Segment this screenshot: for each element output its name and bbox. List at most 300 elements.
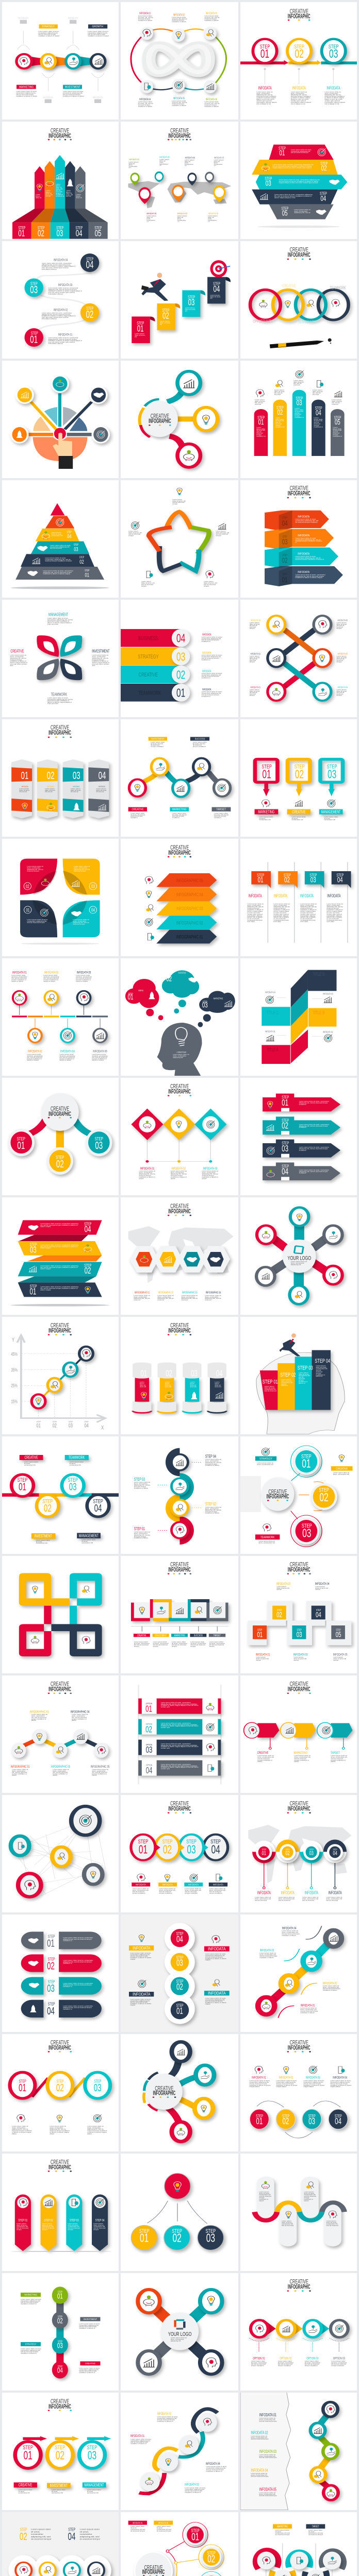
panel: zigzag ribbon bands (2, 1197, 119, 1315)
numbers: STEP (308, 2114, 316, 2119)
top headings: INFODATA 04 (315, 1582, 329, 1586)
numbers: 03 (30, 1246, 37, 1255)
pill labels: INVESTMENT (155, 1634, 167, 1637)
arcs (256, 2550, 344, 2576)
numbers: 02 (276, 1611, 282, 1619)
lorem: Lorem ipsum dolor sit amet, consectetur adipiscing elit, sed do eiusmod tempor incididunt ut labore et dolore magna aliqua ut enim ad minim veniam quis nostrud exercitation ullamco laboris nisi ut aliquip ex ea commodo consequat duis aute irure dolor (273, 903, 290, 922)
numbers: STEP (58, 2340, 62, 2343)
headings: STEP 02 (205, 1502, 216, 1506)
discs (250, 2109, 348, 2129)
lorem: Lorem ipsum dolor sit amet, consectetur adipiscing elit, sed do eiusmod tempor incididunt ut labore et (296, 537, 322, 544)
rings (253, 39, 346, 63)
numbers (21, 770, 106, 782)
axis labels: 35% (11, 1367, 18, 1372)
headings: INFOGRAPHIC 04 (206, 1291, 221, 1294)
labelled pills: GROWTH (92, 25, 103, 28)
numbers: 02 (284, 876, 290, 884)
title: INFOGRAPHIC (168, 850, 191, 857)
numbers (67, 531, 89, 579)
headings: INFODATA (99, 785, 106, 788)
headings: TARGET (331, 1751, 340, 1755)
numbers: 04 (282, 1167, 288, 1177)
headings: INFODATA 06 (206, 98, 217, 101)
numbers: STEP (262, 1848, 266, 1851)
icons (140, 1256, 221, 1263)
arrows (265, 511, 343, 586)
labelled pills: MARKETING (19, 86, 34, 89)
step numbers: STEP (94, 226, 102, 230)
title (168, 1083, 191, 1096)
lorem: Lorem ipsum dolor sit amet, consectetur adipiscing elit, sed do eiusmod tempor incididunt ut labore (134, 1532, 150, 1539)
top pills: SUCCESS (195, 737, 205, 740)
grey connector lines (17, 31, 104, 91)
numbers: 01 (30, 1287, 36, 1297)
runner (279, 1333, 300, 1357)
outer rings (291, 1446, 331, 1547)
numbers: STEP (176, 2004, 184, 2008)
lorem: Lorem ipsum dolor sit amet, consectetur adipiscing elit, sed do eiusmod tempor incididunt ut labore et (21, 2348, 41, 2354)
panel: three arrow rings (2, 2393, 119, 2510)
arrows (278, 1926, 322, 2018)
bulb (174, 2181, 181, 2191)
panel: network of nodes (2, 1795, 119, 1912)
pin faces (132, 173, 224, 199)
lorem: Lorem ipsum dolor sit amet, elit sed do eiusmod tempor incididunt (130, 812, 145, 819)
bottom headings: INFODATA 06 (93, 1050, 107, 1054)
pen (270, 338, 332, 348)
shadow (257, 226, 340, 228)
panel: stacked bars 04-01 (121, 600, 238, 717)
stems (266, 2544, 332, 2576)
icon nodes (140, 27, 217, 93)
numbers: STEP (286, 1848, 290, 1851)
lorem: Lorem ipsum dolor sit amet, elit sed do (66, 190, 73, 197)
title (48, 2159, 72, 2172)
panel: rope of three rings (2, 2034, 119, 2151)
rings (177, 371, 218, 467)
panel: X crossing links (240, 600, 357, 717)
arrow labels: INFOGRAPHIC 04 (176, 892, 203, 897)
blocks (20, 859, 100, 937)
shadow (11, 1304, 109, 1307)
numbers: STEP (210, 1839, 221, 1845)
panel: hub with four branches (121, 2034, 238, 2151)
lorem: Lorem ipsum dolor sit amet elit sed do eiusmod tempor incididunt ut (314, 417, 323, 428)
icons (262, 1214, 338, 1298)
axis labels: X (101, 1425, 104, 1431)
numbers: STEP (93, 1498, 103, 1505)
panel: zigzag squares (240, 1556, 357, 1673)
tab titles: TITLE D (313, 972, 325, 977)
numbers: STEP (333, 1848, 337, 1851)
connectors (39, 1353, 86, 1401)
title: INFOGRAPHIC (288, 2284, 311, 2291)
bulb (175, 1027, 187, 1046)
title: INFOGRAPHIC (48, 2044, 71, 2052)
network lines (14, 1821, 105, 1896)
bars (260, 1350, 331, 1410)
discs (311, 2402, 338, 2500)
box numbers: 03 (282, 538, 288, 546)
headings: OPTION 03 (333, 2357, 345, 2361)
navy cloud (199, 991, 235, 1013)
lorem: Lorem ipsum dolor sit amet, consectetur adipiscing elit, sed do eiusmod tempor incididunt ut labore et dolore magna aliqua ut enim ad minim veniam quis (161, 1764, 199, 1770)
headings (129, 156, 224, 215)
pills (128, 2521, 173, 2576)
lorem: Lorem ipsum dolor sit amet, elit sed do eiusmod tempor incididunt (214, 812, 229, 819)
panel: four discs with arrows (240, 2034, 357, 2151)
pointers (263, 2319, 329, 2337)
headings (134, 1454, 216, 1531)
headings: INFODATA (202, 651, 211, 654)
numbers: 01 (137, 324, 144, 334)
hub (146, 2074, 183, 2110)
panel: overlapping discs on grey (2, 2512, 119, 2576)
panel: pointed rings with options (240, 2273, 357, 2391)
option labels: 01 (145, 1705, 152, 1714)
headings: INFODATA 04 (338, 686, 348, 689)
numbers: STEP (297, 1629, 302, 1632)
lorem: Lorem ipsum dolor sit amet elit sed do eiusmod tempor (250, 622, 259, 629)
step numbers (257, 397, 341, 427)
teal cloud (162, 970, 199, 998)
shadow (11, 586, 109, 589)
panel: hand pressing fan (2, 361, 119, 478)
lorem 05: Lorem ipsum dolor sit amet, elit, sed do eiusmod tempor, incididunt ut labore (172, 100, 187, 106)
numbers: 02 (47, 770, 55, 782)
arrow labels: INFOGRAPHIC 01 (176, 934, 203, 940)
numbers: STEP (284, 873, 291, 878)
title: CREATIVE (144, 2565, 163, 2571)
panel: square signposts (240, 719, 357, 837)
box numbers: STEP (283, 554, 287, 557)
headings: INFODATA (73, 785, 80, 788)
headings: OPTION 01 (253, 2357, 265, 2361)
numbers (57, 2291, 63, 2375)
ribbon curls (150, 277, 231, 321)
numbers: 03 (88, 2449, 96, 2462)
panel: head with thought clouds (121, 958, 238, 1076)
headings: INFODATA 04 (282, 1927, 296, 1930)
step numbers: 01 (18, 229, 25, 239)
numbers: 04 (333, 1850, 337, 1857)
links (32, 2078, 85, 2097)
axis labels: STEP (84, 1420, 89, 1423)
numbers: STEP (68, 1477, 78, 1484)
title: INFOGRAPHIC (48, 730, 71, 737)
orbits (183, 2522, 224, 2576)
numbers: STEP (48, 2003, 55, 2007)
numbers: 01 (257, 1630, 263, 1639)
numbers: STEP (282, 1096, 289, 1100)
step numbers: STEP (257, 416, 265, 420)
links (22, 1740, 99, 1747)
hub arc and links (168, 2541, 199, 2576)
ribbons (257, 1723, 353, 1738)
connectors (291, 1473, 309, 1519)
knot (19, 1573, 102, 1656)
labelled pills: STRATEGY (42, 25, 55, 28)
headings: STEP 01 (134, 1527, 145, 1531)
title: CREATIVE (170, 844, 189, 852)
title (168, 1562, 191, 1574)
bar labels: STEP 04 (315, 1358, 331, 1365)
grey field (240, 1476, 261, 1512)
box numbers: 01 (282, 575, 288, 584)
numbers (137, 282, 220, 334)
step labels: STEP (20, 2528, 27, 2532)
panel: square knot (2, 1556, 119, 1673)
numbers: STEP (162, 1839, 172, 1845)
numbers: STEP (256, 2114, 263, 2119)
cloud numbers: 03 (202, 1001, 208, 1009)
title (287, 2279, 311, 2292)
title: CREATIVE (170, 1562, 189, 1568)
numbers: 03 (57, 2341, 63, 2350)
cloud numbers: STEP (203, 1001, 207, 1004)
bar labels: STEP 02 (280, 1372, 296, 1379)
lorem: Lorem ipsum dolor sit amet, consectetur elit, sed do eiusmod tempor incididunt ut labore (92, 1769, 108, 1776)
nodes (10, 375, 110, 444)
lorem: Lorem ipsum dolor sit amet, consectetur elit, sed do eiusmod tempor incididunt ut labore et dolore (11, 975, 27, 982)
lorem: Lorem ipsum dolor sit amet, consectetur elit, sed do eiusmod tempor incididunt ut labore (257, 1755, 274, 1762)
bars (254, 390, 345, 456)
lorem: Lorem ipsum dolor sit amet, consectetur adipiscing elit, sed do eiusmod tempor incididunt ut labore et dolore magna aliqua ut enim ad minim veniam quis (161, 1722, 199, 1728)
icons (17, 2114, 102, 2122)
numbers: STEP (186, 1839, 197, 1845)
title: CREATIVE (170, 128, 189, 134)
lorem: Lorem ipsum dolor sit amet elit sed do eiusmod tempor incididunt ut (295, 408, 304, 418)
stems (20, 1005, 100, 1028)
icons (262, 2181, 337, 2218)
signposts (255, 759, 342, 789)
step numbers: 02 (38, 229, 44, 239)
numbers: 02 (56, 2449, 64, 2462)
panel: serpentine steps (2, 241, 119, 359)
numbers (191, 2528, 216, 2576)
guides (21, 1353, 86, 1418)
logo mark (294, 1246, 303, 1253)
logo mark (175, 2320, 184, 2329)
lorem: Lorem ipsum dolor sit amet, consectetur adipiscing elit, sed do eiusmod (157, 1295, 174, 1301)
numbers: STEP (282, 2114, 289, 2119)
headings: INFODATA 03 (260, 1949, 274, 1953)
pill labels: CREATIVE (137, 1634, 146, 1637)
side labels (265, 991, 333, 1033)
target (210, 260, 230, 277)
headings: INFODATA (329, 1891, 342, 1895)
step numbers: 02 (277, 408, 283, 417)
numbers: 04 (316, 1611, 321, 1619)
numbers: STEP (56, 1155, 64, 1160)
inner rings (256, 1844, 343, 1860)
numbers: 03 (47, 1982, 55, 1994)
icons (262, 1448, 344, 1531)
lorem 03: Lorem ipsum dolor sit amet, elit, sed do eiusmod tempor, incididunt ut labore (204, 15, 220, 21)
title: INFOGRAPHIC (288, 251, 311, 259)
headings: INFODATA (298, 515, 310, 519)
lorem: Lorem ipsum dolor sit amet, consectetur adipiscing elit, sed do eiusmod tempor incididunt ut labore et dolore (139, 1171, 155, 1179)
pills: CREATIVE (336, 1467, 348, 1470)
lorem: Lorem ipsum dolor sit amet, elit sed do eiusmod tempor (216, 531, 229, 536)
lorem: Lorem ipsum dolor sit amet, consectetur elit sed do eiusmod tempor (17, 2223, 28, 2230)
lorem: Lorem ipsum dolor sit amet, consectetur adipiscing elit, sed do eiusmod tempor incididunt ut labore et dolore magna aliqua ut enim ad minim veniam quis (92, 655, 109, 666)
numbers: 03 (95, 1140, 103, 1151)
bottom labels: INVESTMENT (34, 1534, 52, 1538)
lorem: Lorem ipsum dolor sit amet, consectetur adipiscing elit, sed do eiusmod (205, 1295, 221, 1301)
headings: INFODATA 04 (333, 2076, 347, 2080)
lorem: Lorem ipsum dolor sit amet, consectetur adipiscing elit, sed do eiusmod tempor incididunt ut labore et dolore magna aliqua (303, 2080, 324, 2088)
numbers (30, 1223, 92, 1297)
numbers: 02 (57, 2316, 63, 2325)
pills (255, 809, 342, 815)
title (153, 2086, 176, 2098)
bottom pills (31, 1533, 101, 1539)
numbers (18, 1477, 103, 1514)
pills: INVESTMENT (84, 2318, 97, 2320)
lorem: Lorem ipsum dolor sit amet, consectetur elit, sed do eiusmod tempor incididunt ut labore (31, 1714, 47, 1721)
panel: four cylinders (121, 1317, 238, 1434)
headings: INFODATA (298, 571, 310, 574)
numbers: 01 (282, 1098, 288, 1108)
step rings with icons (17, 54, 105, 69)
numbers: STEP (43, 1498, 53, 1505)
lorem: Lorem ipsum dolor sit amet, consectetur adipiscing elit, sed do eiusmod tempor incididunt ut labore et (157, 2416, 178, 2422)
title (48, 2398, 72, 2411)
headings: INFODATA 05 (259, 2488, 276, 2492)
bottom headings: INFODATA 03 (293, 1653, 308, 1657)
lorem: Lorem ipsum dolor sit amet, elit sed do eiusmod tempor (172, 499, 186, 505)
lorem: Lorem ipsum dolor sit amet, consectetur elit sed do eiusmod tempor incididunt (133, 1888, 149, 1894)
numbers: STEP (30, 1243, 37, 1247)
flags (251, 871, 351, 888)
leaves (32, 871, 87, 925)
thought bubbles (146, 999, 211, 1027)
numbers: 02 (85, 1266, 91, 1276)
numbers: 01 (262, 1850, 266, 1857)
arrow heads (263, 789, 335, 796)
lorem 06: Lorem ipsum dolor sit amet, elit, sed do eiusmod tempor, incididunt ut labore (204, 101, 220, 107)
title: INFOGRAPHIC (288, 2044, 311, 2052)
sketched head (256, 1352, 345, 1434)
lorem: Lorem ipsum dolor sit amet, consectetur adipiscing elit, sed do eiusmod tempor incididunt ut labore et dolore magna aliqua (87, 2126, 107, 2134)
top pills: MARKETING (277, 2525, 288, 2528)
numbers (140, 1369, 223, 1379)
lorem: Lorem ipsum dolor sit amet, consectetur adipiscing elit, sed do eiusmod tempor incididunt ut (202, 691, 222, 697)
lorem: Lorem ipsum dolor sit amet elit sed do eiusmod tempor (250, 655, 259, 663)
rings (129, 758, 230, 797)
panel: three rings on arrow (240, 2, 357, 120)
lorem: Lorem ipsum dolor sit amet, consectetur adipiscing elit, sed do eiusmod tempor incididunt ut labore et dolore magna aliqua ut enim ad minim veniam quis nostrud exercitation ullamco (42, 312, 75, 319)
lorem: Lorem ipsum dolor sit amet, consectetur elit sed do eiusmod tempor incididunt (331, 2361, 347, 2366)
rope (2, 1493, 119, 1497)
cloud numbers: SUCCESS (178, 971, 186, 974)
numbers: 01 (176, 2007, 183, 2016)
lorem: Lorem ipsum dolor sit amet, consectetur elit sed do eiusmod tempor (190, 1641, 206, 1647)
headings: INFODATA (298, 534, 310, 537)
step labels: STEP (265, 177, 272, 181)
title (48, 724, 72, 738)
branches (25, 1120, 94, 1153)
numbers: 04 (337, 876, 343, 884)
headings (54, 259, 72, 337)
lorem: Lorem ipsum dolor sit amet elit sed do eiusmod tempor (336, 689, 347, 696)
links (52, 2301, 68, 2365)
step discs (10, 1131, 110, 1172)
lorem: Lorem ipsum dolor sit amet elit sed do eiusmod tempor (336, 622, 347, 629)
woven bands (131, 1599, 228, 1621)
title: INFOGRAPHIC (168, 1567, 191, 1573)
title (287, 1801, 311, 1814)
icons (314, 2405, 335, 2497)
top headings: INFODATA 05 (77, 971, 91, 975)
title (48, 2040, 72, 2053)
headings: INFODATA 05 (173, 97, 185, 100)
star ribbons (149, 512, 209, 571)
lorem: Lorem ipsum dolor sit amet, consectetur adipiscing elit, sed do eiusmod tempor incididunt ut labore et dolore magna aliqua (330, 2080, 351, 2088)
title: INFOGRAPHIC (288, 490, 311, 497)
side shadows (138, 1685, 222, 1784)
lorem: Lorem ipsum dolor sit amet, consectetur adipiscing elit, sed do eiusmod tempor incididunt ut labore et dolore (171, 1171, 187, 1179)
step labels: 03 (266, 179, 271, 188)
numbers: STEP (295, 764, 304, 770)
petals (37, 635, 82, 680)
headings: INFODATA 05 (159, 156, 170, 159)
numbers: 03 (297, 1630, 302, 1639)
lorem: Lorem ipsum dolor sit amet, consectetur adipiscing elit, sed do eiusmod tempor incididunt ut (202, 655, 222, 660)
panel: vertical step discs on grey (121, 1914, 238, 2032)
panel: pyramid (2, 480, 119, 598)
grey percent labels (18, 16, 103, 103)
hub title: CREATIVE (151, 413, 169, 420)
arrows (277, 998, 322, 1037)
lorem: Lorem ipsum dolor sit amet, consectetur adipiscing elit, sed do eiusmod tempor incididunt ut labore et dolore (202, 1171, 218, 1179)
step numbers: 05 (335, 418, 340, 427)
title: INFOGRAPHIC (168, 1806, 191, 1812)
connectors (264, 68, 334, 84)
infinity symbol (149, 46, 208, 72)
icons (40, 878, 82, 917)
lorem: Lorem ipsum dolor sit amet, consectetur elit, sed do eiusmod tempor incididunt ut labore et dolore (27, 1054, 43, 1061)
centre (283, 1240, 316, 1273)
option labels: 02 (145, 1725, 152, 1735)
numbers: 01 (85, 572, 89, 579)
tabs (262, 1007, 336, 1064)
lorem: Lorem ipsum dolor sit amet elit sed do eiusmod tempor incididunt ut (275, 417, 284, 428)
option labels: 04 (146, 1766, 152, 1776)
lorem: Lorem ipsum dolor sit amet, consectetur adipiscing elit, sed do eiusmod tempor incididunt ut labore et dolore magna aliqua (50, 2126, 70, 2134)
title: INFOGRAPHIC (48, 1328, 71, 1334)
bottom pills (128, 807, 231, 811)
white discs (165, 1923, 195, 2024)
numbers: STEP (301, 1453, 312, 1460)
title (287, 247, 311, 260)
numbers: 02 (295, 768, 304, 782)
hub (135, 2552, 172, 2576)
step labels: 01 (279, 149, 285, 157)
icons (27, 519, 64, 576)
numbers: 01 (17, 1140, 25, 1151)
panel: four petals (2, 600, 119, 717)
half rings (252, 1840, 347, 1863)
rings (10, 2072, 110, 2098)
headings: INFOGRAPHIC 02 (158, 1291, 174, 1294)
icons (137, 1874, 222, 1882)
title: INFOGRAPHIC (288, 1686, 311, 1693)
headings: INFODATA (305, 1891, 318, 1895)
title: CREATIVE (268, 1489, 287, 1496)
arrows (156, 873, 217, 943)
